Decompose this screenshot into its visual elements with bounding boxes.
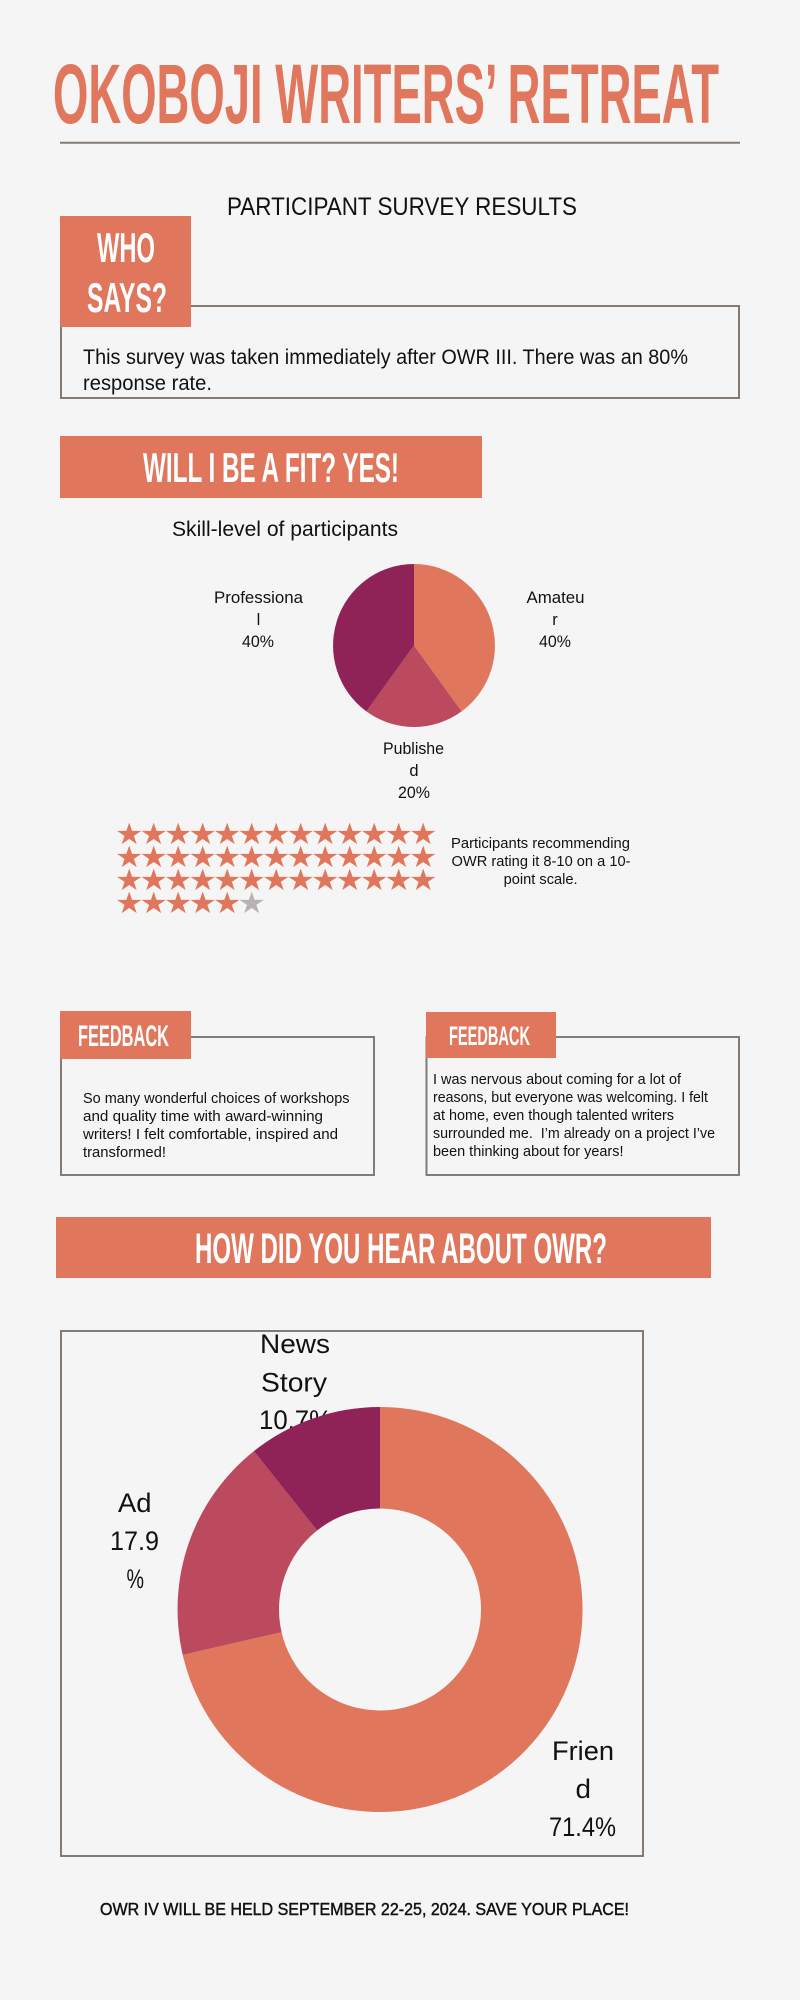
label: ad: Ad xyxy=(118,1488,152,1518)
label: friend: Frien xyxy=(552,1736,614,1766)
feedback quote 2 xyxy=(433,1072,715,1160)
label: news story: 10.7% xyxy=(259,1405,332,1435)
feedback quote 2: at home, even though talented writers xyxy=(433,1108,674,1124)
label: amateur: r xyxy=(552,611,558,629)
label: professional: l xyxy=(257,611,260,629)
label: friend: d xyxy=(576,1774,591,1804)
feedback tag 2 xyxy=(426,1012,556,1058)
label: ad xyxy=(110,1488,159,1594)
who says tag: WHO xyxy=(97,224,155,271)
pie chart: skill level xyxy=(333,564,495,727)
label: published xyxy=(383,740,444,802)
feedback quote 1: writers! I felt comfortable, inspired and xyxy=(82,1127,338,1143)
feedback tag 1: FEEDBACK xyxy=(78,1020,169,1053)
who says tag: SAYS? xyxy=(87,274,167,321)
feedback quote 2: I was nervous about coming for a lot of xyxy=(433,1072,682,1088)
donut chart xyxy=(178,1407,583,1812)
label: news story: News xyxy=(260,1329,330,1359)
star rating caption xyxy=(451,836,631,888)
feedback quote 2: been thinking about for years! xyxy=(433,1144,624,1160)
subtitle: PARTICIPANT SURVEY RESULTS xyxy=(227,193,577,221)
panel: feedback 2 xyxy=(426,1012,739,1175)
label: friend: 71.4% xyxy=(549,1812,616,1842)
feedback quote 1: and quality time with award-winning xyxy=(83,1109,323,1125)
banner: how did you hear xyxy=(56,1217,711,1278)
star rating caption: Participants recommending xyxy=(451,836,630,852)
survey description: This survey was taken immediately after OWR III. There was an 80% xyxy=(83,346,688,369)
label: ad: 17.9 xyxy=(110,1526,159,1556)
survey description xyxy=(83,346,688,395)
star rating caption: OWR rating it 8-10 on a 10- xyxy=(452,854,631,870)
feedback quote 1 xyxy=(82,1091,350,1161)
label: professional xyxy=(214,589,304,651)
label: news story xyxy=(259,1329,332,1435)
footer call to action: OWR IV WILL BE HELD SEPTEMBER 22-25, 2024. SAVE YOUR PLACE! xyxy=(100,1899,629,1919)
panel: who says xyxy=(60,216,739,398)
feedback tag 2: FEEDBACK xyxy=(449,1021,530,1051)
label: professional: Professiona xyxy=(214,589,304,607)
panel: referral chart xyxy=(61,1329,643,1856)
chart heading: skill level: Skill-level of participants xyxy=(172,518,398,541)
label: published: 20% xyxy=(398,784,430,802)
feedback quote 2: reasons, but everyone was welcoming. I felt xyxy=(433,1090,708,1106)
star rating caption: point scale. xyxy=(504,872,578,888)
label: amateur: Amateu xyxy=(526,589,584,607)
feedback quote 2: surrounded me. I’m already on a project I’ve xyxy=(433,1126,715,1142)
label: amateur: 40% xyxy=(539,633,571,651)
banner: will I be a fit: WILL I BE A FIT? YES! xyxy=(143,444,399,491)
who says tag xyxy=(60,216,191,327)
label: professional: 40% xyxy=(242,633,274,651)
panel: feedback 1 xyxy=(60,1011,374,1175)
label: friend xyxy=(549,1736,616,1842)
label: ad: % xyxy=(126,1564,144,1594)
label: published: Publishe xyxy=(383,740,444,758)
survey description: response rate. xyxy=(83,372,212,395)
feedback quote 1: So many wonderful choices of workshops xyxy=(83,1091,350,1107)
feedback quote 1: transformed! xyxy=(83,1145,166,1161)
banner: will I be a fit xyxy=(60,436,482,498)
star rating pictogram xyxy=(117,823,435,913)
label: amateur xyxy=(526,589,584,651)
label: published: d xyxy=(409,762,419,780)
label: news story: Story xyxy=(261,1368,328,1398)
feedback tag 1 xyxy=(60,1011,191,1059)
